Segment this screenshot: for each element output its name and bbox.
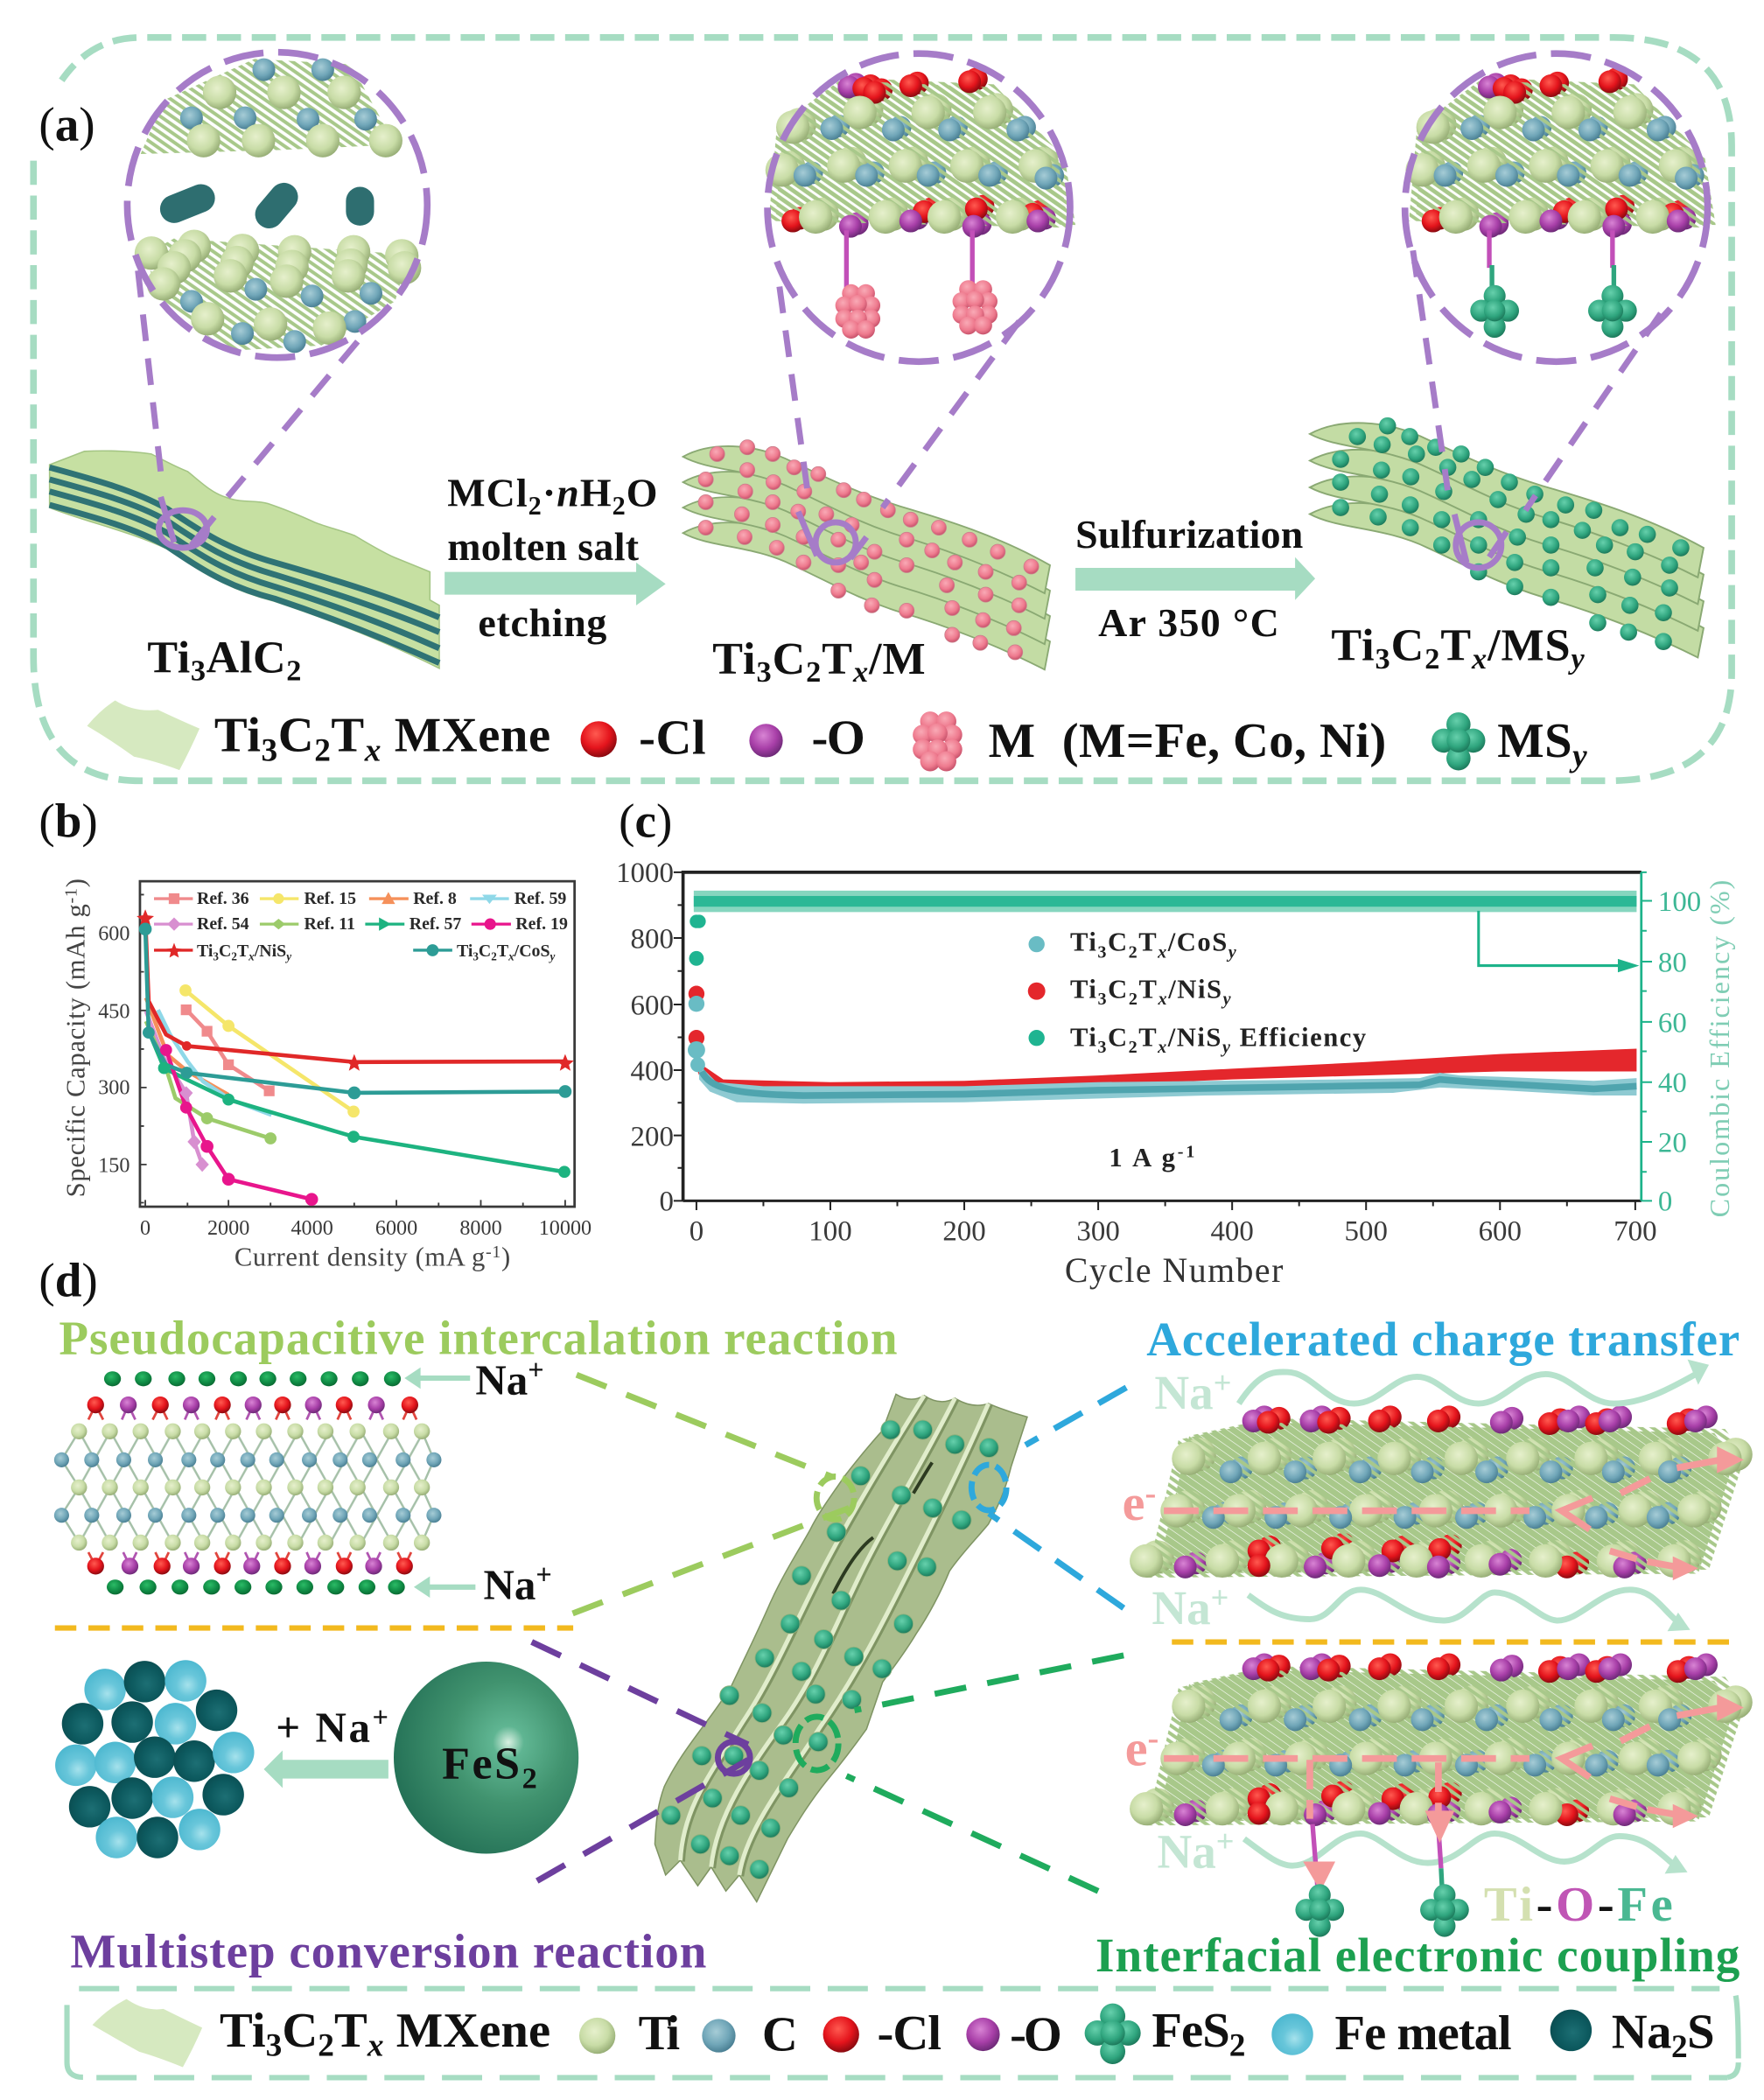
chart c legend: x (1157, 1038, 1166, 1057)
chart b: rate capability: 300 (98, 1076, 130, 1100)
legend d: entries: T (334, 2004, 368, 2058)
label: Ti3C2Tx/MSy: T (1440, 621, 1471, 671)
text: sulfurization conditions (1075, 512, 1303, 645)
label: Ti3C2Tx/MSy: C (1391, 621, 1424, 671)
label: Ti3C2Tx/M: /M (868, 634, 926, 684)
yellow divider right (1172, 1641, 1732, 1644)
text: sulfurization conditions: Ar 350 °C (1098, 600, 1279, 645)
Na+ faint labels (1152, 1365, 1235, 1879)
e- label top: - (1144, 1475, 1156, 1512)
chart c legend: x (1157, 942, 1166, 962)
chart c: cycling: Coulombic Efficiency (%) (1704, 880, 1735, 1217)
legend d: entries: Na (1612, 2005, 1671, 2059)
chart c legend: /NiS (1167, 974, 1222, 1004)
e- label top: e (1123, 1474, 1144, 1531)
magnifier: Ti3AlC2 (127, 52, 427, 358)
Na+ faint labels: + (1216, 1824, 1235, 1858)
legend d: entries: Ti (220, 2004, 266, 2058)
chart b: rate capability (60, 878, 592, 1271)
arrow: conversion (264, 1751, 388, 1788)
text: reagents: O (626, 471, 658, 515)
arrow: Na+ top (404, 1368, 470, 1389)
chart c legend: C (1108, 974, 1127, 1004)
chart b legend: C (219, 942, 231, 961)
sheet: Ti3C2Tx/MSy (1310, 417, 1704, 657)
zoom guide lines: conversion (532, 1642, 750, 1881)
Na+ faint labels: Na (1154, 1366, 1214, 1419)
chart b legend: Ref. 59 (514, 889, 566, 908)
chart b: rate capability: -1 (486, 1242, 500, 1262)
label: Ti3C2Tx/M: 2 (806, 655, 821, 689)
sphere: FeS2: 2 (522, 1761, 537, 1795)
chart b: rate capability: 0 (140, 1216, 150, 1240)
chart c: cycling: 200 (631, 1121, 674, 1152)
label d: (d) (38, 1254, 98, 1307)
zoom guide lines: charge transfer (971, 1388, 1126, 1608)
chart c legend: Efficiency (1231, 1022, 1366, 1052)
chart b: rate capability: Current density (mA g (234, 1242, 485, 1271)
chart c: cycling: 600 (1479, 1215, 1522, 1247)
chart c legend: y (1226, 942, 1237, 962)
label: Ti3C2Tx/M: 3 (756, 655, 772, 689)
legend a: MXene (382, 709, 550, 763)
text: + Na+: + Na (276, 1704, 370, 1752)
legend d: entries (93, 1999, 1715, 2067)
chart c: cycling: 20 (1658, 1127, 1687, 1158)
label c: (c) (619, 794, 672, 848)
chart c legend: 2 (1129, 1038, 1138, 1057)
current density note: 1 A g (1109, 1143, 1175, 1172)
chart c: cycling: 700 (1614, 1215, 1657, 1247)
chart b legend: Ti (457, 942, 472, 961)
particle cluster: Fe metal and Na2S (55, 1660, 255, 1858)
electron paths bottom (1164, 1694, 1744, 1828)
label: Ti3C2Tx/M: T (822, 634, 852, 684)
legend a: 3 (261, 732, 277, 768)
chart b legend: y (284, 949, 291, 962)
legend a: -Cl (639, 711, 706, 766)
text: Na+ bottom: + (536, 1559, 552, 1591)
chart c: cycling: 40 (1658, 1068, 1687, 1099)
arrow: Na+ bottom (414, 1577, 475, 1598)
text: Na+ bottom: Na (484, 1561, 536, 1609)
chart c: cycling (616, 858, 1735, 1290)
label a: (a) (38, 98, 95, 151)
legend a: C (278, 709, 314, 763)
magnifier: Ti3C2Tx/M (766, 53, 1075, 361)
label: Ti3C2Tx/M: C (773, 634, 805, 684)
chart b legend: Ref. 15 (304, 889, 356, 908)
chart b legend: 2 (491, 949, 497, 962)
chart b legend: C (479, 942, 491, 961)
chart b: rate capability: 8000 (459, 1216, 502, 1240)
label: Ti3C2Tx/M: Ti (712, 634, 755, 684)
legend d: entries: 2 (318, 2027, 334, 2063)
chart c legend: 2 (1129, 990, 1138, 1009)
chart c legend: /CoS (1167, 928, 1227, 957)
slab: accelerated charge transfer (1130, 1405, 1753, 1578)
sheet: Ti3AlC2 (50, 451, 439, 668)
chart c: cycling: 400 (1210, 1215, 1254, 1247)
chart c: cycling: 0 (659, 1186, 674, 1218)
chart b: rate capability: ) (501, 1242, 510, 1271)
chart b: rate capability: 450 (98, 999, 130, 1023)
label: Ti3C2Tx/MSy: y (1567, 642, 1585, 676)
text: reagents: 2 (612, 491, 626, 521)
label: Ti3AlC2: 3 (191, 654, 206, 688)
chart c: cycling: 1000 (616, 858, 674, 889)
chart c legend: Ti (1070, 1022, 1096, 1052)
label: Ti3C2Tx/MSy: 3 (1376, 642, 1390, 676)
chart c legend (1028, 928, 1366, 1057)
label b: (b) (38, 794, 98, 848)
chart c legend: y (1220, 1038, 1231, 1057)
e- label bottom: - (1148, 1720, 1158, 1757)
Na+ path top (1239, 1360, 1709, 1404)
chart c legend: Ti (1070, 928, 1096, 957)
legend d: entries: C (762, 2007, 798, 2062)
chart b legend: T (497, 942, 508, 961)
slab: interfacial coupling (1130, 1654, 1753, 1826)
Na+ faint labels: Na (1152, 1581, 1211, 1634)
zoom guide lines: pseudocapacitive (572, 1375, 854, 1614)
chart c legend: 2 (1129, 942, 1138, 962)
chart b legend: x (508, 949, 514, 962)
legend a: MS (1497, 714, 1572, 768)
chart c: cycling: 0 (1658, 1186, 1672, 1218)
Na+ path bottom (1244, 1833, 1688, 1873)
legend d: entries: -O (1010, 2007, 1062, 2062)
legend a: y (1569, 738, 1587, 774)
legend d: entries: Ti (639, 2006, 680, 2061)
sphere: FeS2: FeS (442, 1740, 520, 1789)
chart c: cycling: 100 (1658, 886, 1701, 918)
chart c legend: 3 (1097, 942, 1106, 962)
text: reagents: molten salt (447, 524, 640, 569)
legend d: entries: 2 (1671, 2029, 1688, 2065)
chart b: rate capability: 10000 (539, 1216, 592, 1240)
legend a: M (989, 714, 1035, 768)
chart b: rate capability: -1 (61, 888, 80, 904)
Na+ path middle (1249, 1590, 1690, 1631)
heading: multistep conversion: Multistep conversion reaction (70, 1924, 706, 1978)
label: Ti3C2Tx/MSy: Ti (1331, 621, 1375, 671)
chart c: cycling: 600 (631, 990, 674, 1021)
lattice: Na+ intercalation (54, 1371, 441, 1594)
current density note: -1 (1178, 1142, 1194, 1161)
zoom guide lines: coupling (795, 1656, 1124, 1891)
legend d: entries: 2 (1229, 2027, 1245, 2063)
text: reagents: · (542, 471, 556, 515)
heading: accelerated charge transfer: Accelerated charge transfer (1146, 1312, 1740, 1366)
legend a: 2 (314, 732, 331, 768)
legend d: entries: S (1687, 2005, 1715, 2059)
chart c: cycling: Cycle Number (1065, 1251, 1283, 1290)
label: Ti3AlC2: Ti (147, 633, 190, 682)
Na+ faint labels: + (1214, 1365, 1231, 1400)
legend a: (M=Fe, Co, Ni) (1062, 714, 1386, 768)
chart c: cycling: 800 (631, 924, 674, 956)
chart b legend: Ti (197, 942, 213, 961)
text: reagents (447, 471, 658, 645)
text: reagents: MCl (447, 471, 528, 515)
Na+ faint labels: + (1211, 1580, 1228, 1615)
text: Na+ top: + (528, 1354, 544, 1386)
chart c legend: T (1139, 974, 1157, 1004)
chart c legend: x (1158, 990, 1167, 1009)
chart b legend: Ref. 11 (304, 914, 355, 934)
chart c legend: T (1138, 1022, 1157, 1052)
chart b: rate capability: 4000 (290, 1216, 333, 1240)
label: Ti3AlC2: 2 (286, 654, 301, 688)
text: + Na+: + (372, 1702, 388, 1733)
chart c legend: Ti (1070, 974, 1096, 1004)
chart c: cycling: 60 (1658, 1007, 1687, 1039)
label: Ti3C2Tx/MSy: 2 (1424, 642, 1439, 676)
chart b legend: 3 (472, 949, 479, 962)
chart c: cycling: 300 (1076, 1215, 1120, 1247)
label: Ti3C2Tx/M: x (852, 655, 868, 689)
chart b: rate capability: 600 (98, 921, 130, 945)
e- label bottom: e (1125, 1719, 1148, 1776)
text: reagents: 2 (528, 491, 542, 521)
legend d: entries: -Cl (878, 2006, 942, 2061)
label: Ti3AlC2: AlC (206, 633, 286, 682)
legend a: x (364, 732, 381, 768)
text: reagents: nH (556, 471, 612, 515)
heading: pseudocapacitive: Pseudocapacitive intercalation reaction (59, 1311, 898, 1364)
chart b legend: Ref. 57 (410, 914, 461, 934)
magnifier: Ti3C2Tx/MSy (1405, 53, 1716, 361)
chart c legend: 3 (1097, 1038, 1106, 1057)
chart b legend: Ref. 19 (515, 914, 568, 934)
chart c: cycling: 200 (942, 1215, 986, 1247)
chart c legend: y (1221, 990, 1232, 1009)
chart c legend: C (1108, 928, 1127, 957)
chart b: rate capability: ) (60, 878, 90, 887)
chart c: cycling: 0 (690, 1215, 704, 1247)
chart b legend: x (248, 949, 255, 962)
text: reagents: etching (478, 600, 606, 645)
chart c legend: C (1108, 1022, 1127, 1052)
label: Ti3C2Tx/MSy: /MS (1487, 621, 1571, 671)
legend a (87, 701, 1587, 774)
chart c legend: /NiS (1167, 1022, 1221, 1052)
legend d: entries: C (282, 2004, 318, 2058)
arrow: etching (444, 563, 666, 606)
legend a: Ti (214, 709, 261, 763)
legend d: border (67, 1989, 1739, 2077)
chart c: cycling: 80 (1658, 947, 1687, 978)
legend d: entries: Fe metal (1335, 2006, 1512, 2061)
legend d: entries: x (367, 2027, 384, 2063)
label: Ti3C2Tx/MSy: x (1471, 642, 1487, 676)
text: sulfurization conditions: Sulfurization (1075, 512, 1303, 556)
legend d: entries: FeS (1152, 2004, 1230, 2058)
text: Na+ top: Na (475, 1355, 528, 1404)
chart b: rate capability: Specific Capacity (mAh g (60, 904, 90, 1197)
chart c: cycling: 100 (808, 1215, 852, 1247)
FeS2 clusters with bonds (1295, 1810, 1469, 1937)
chart c: cycling: 500 (1345, 1215, 1388, 1247)
chart b legend (154, 889, 568, 962)
heading: interfacial coupling: Interfacial electronic coupling (1096, 1928, 1740, 1982)
chart c legend: 3 (1098, 990, 1107, 1009)
electron paths top (1164, 1446, 1744, 1580)
chart b: rate capability: 6000 (375, 1216, 417, 1240)
chart b legend: Ref. 54 (197, 914, 249, 934)
chart b legend: /CoS (514, 942, 550, 961)
legend a: T (331, 709, 364, 763)
chart b legend: T (237, 942, 248, 961)
text: Ti-O-Fe: Ti-O-Fe (1484, 1878, 1673, 1932)
chart b legend: 2 (231, 949, 237, 962)
chart b legend: y (549, 949, 556, 962)
chart b legend: 3 (213, 949, 219, 962)
sheet: Ti3C2Tx/M (683, 440, 1050, 669)
panel a: dashed border (33, 38, 1732, 780)
central ribbon (654, 1394, 1027, 1901)
chart b legend: /NiS (254, 942, 286, 961)
chart b legend: Ref. 36 (197, 889, 249, 908)
sphere: FeS2 (394, 1662, 578, 1854)
chart b: rate capability: 150 (98, 1153, 130, 1177)
chart c legend: T (1138, 928, 1157, 957)
zoom guide lines a (138, 250, 1661, 568)
legend d: entries: 3 (266, 2027, 282, 2063)
yellow divider left (55, 1627, 573, 1630)
chart c: cycling: 400 (631, 1055, 674, 1087)
Na+ faint labels: Na (1157, 1825, 1216, 1879)
chart b: rate capability: 2000 (207, 1216, 249, 1240)
legend d: entries: MXene (384, 2004, 550, 2058)
legend a: -O (812, 711, 865, 766)
chart b legend: Ref. 8 (413, 889, 457, 908)
arrow: sulfurization (1075, 557, 1315, 600)
